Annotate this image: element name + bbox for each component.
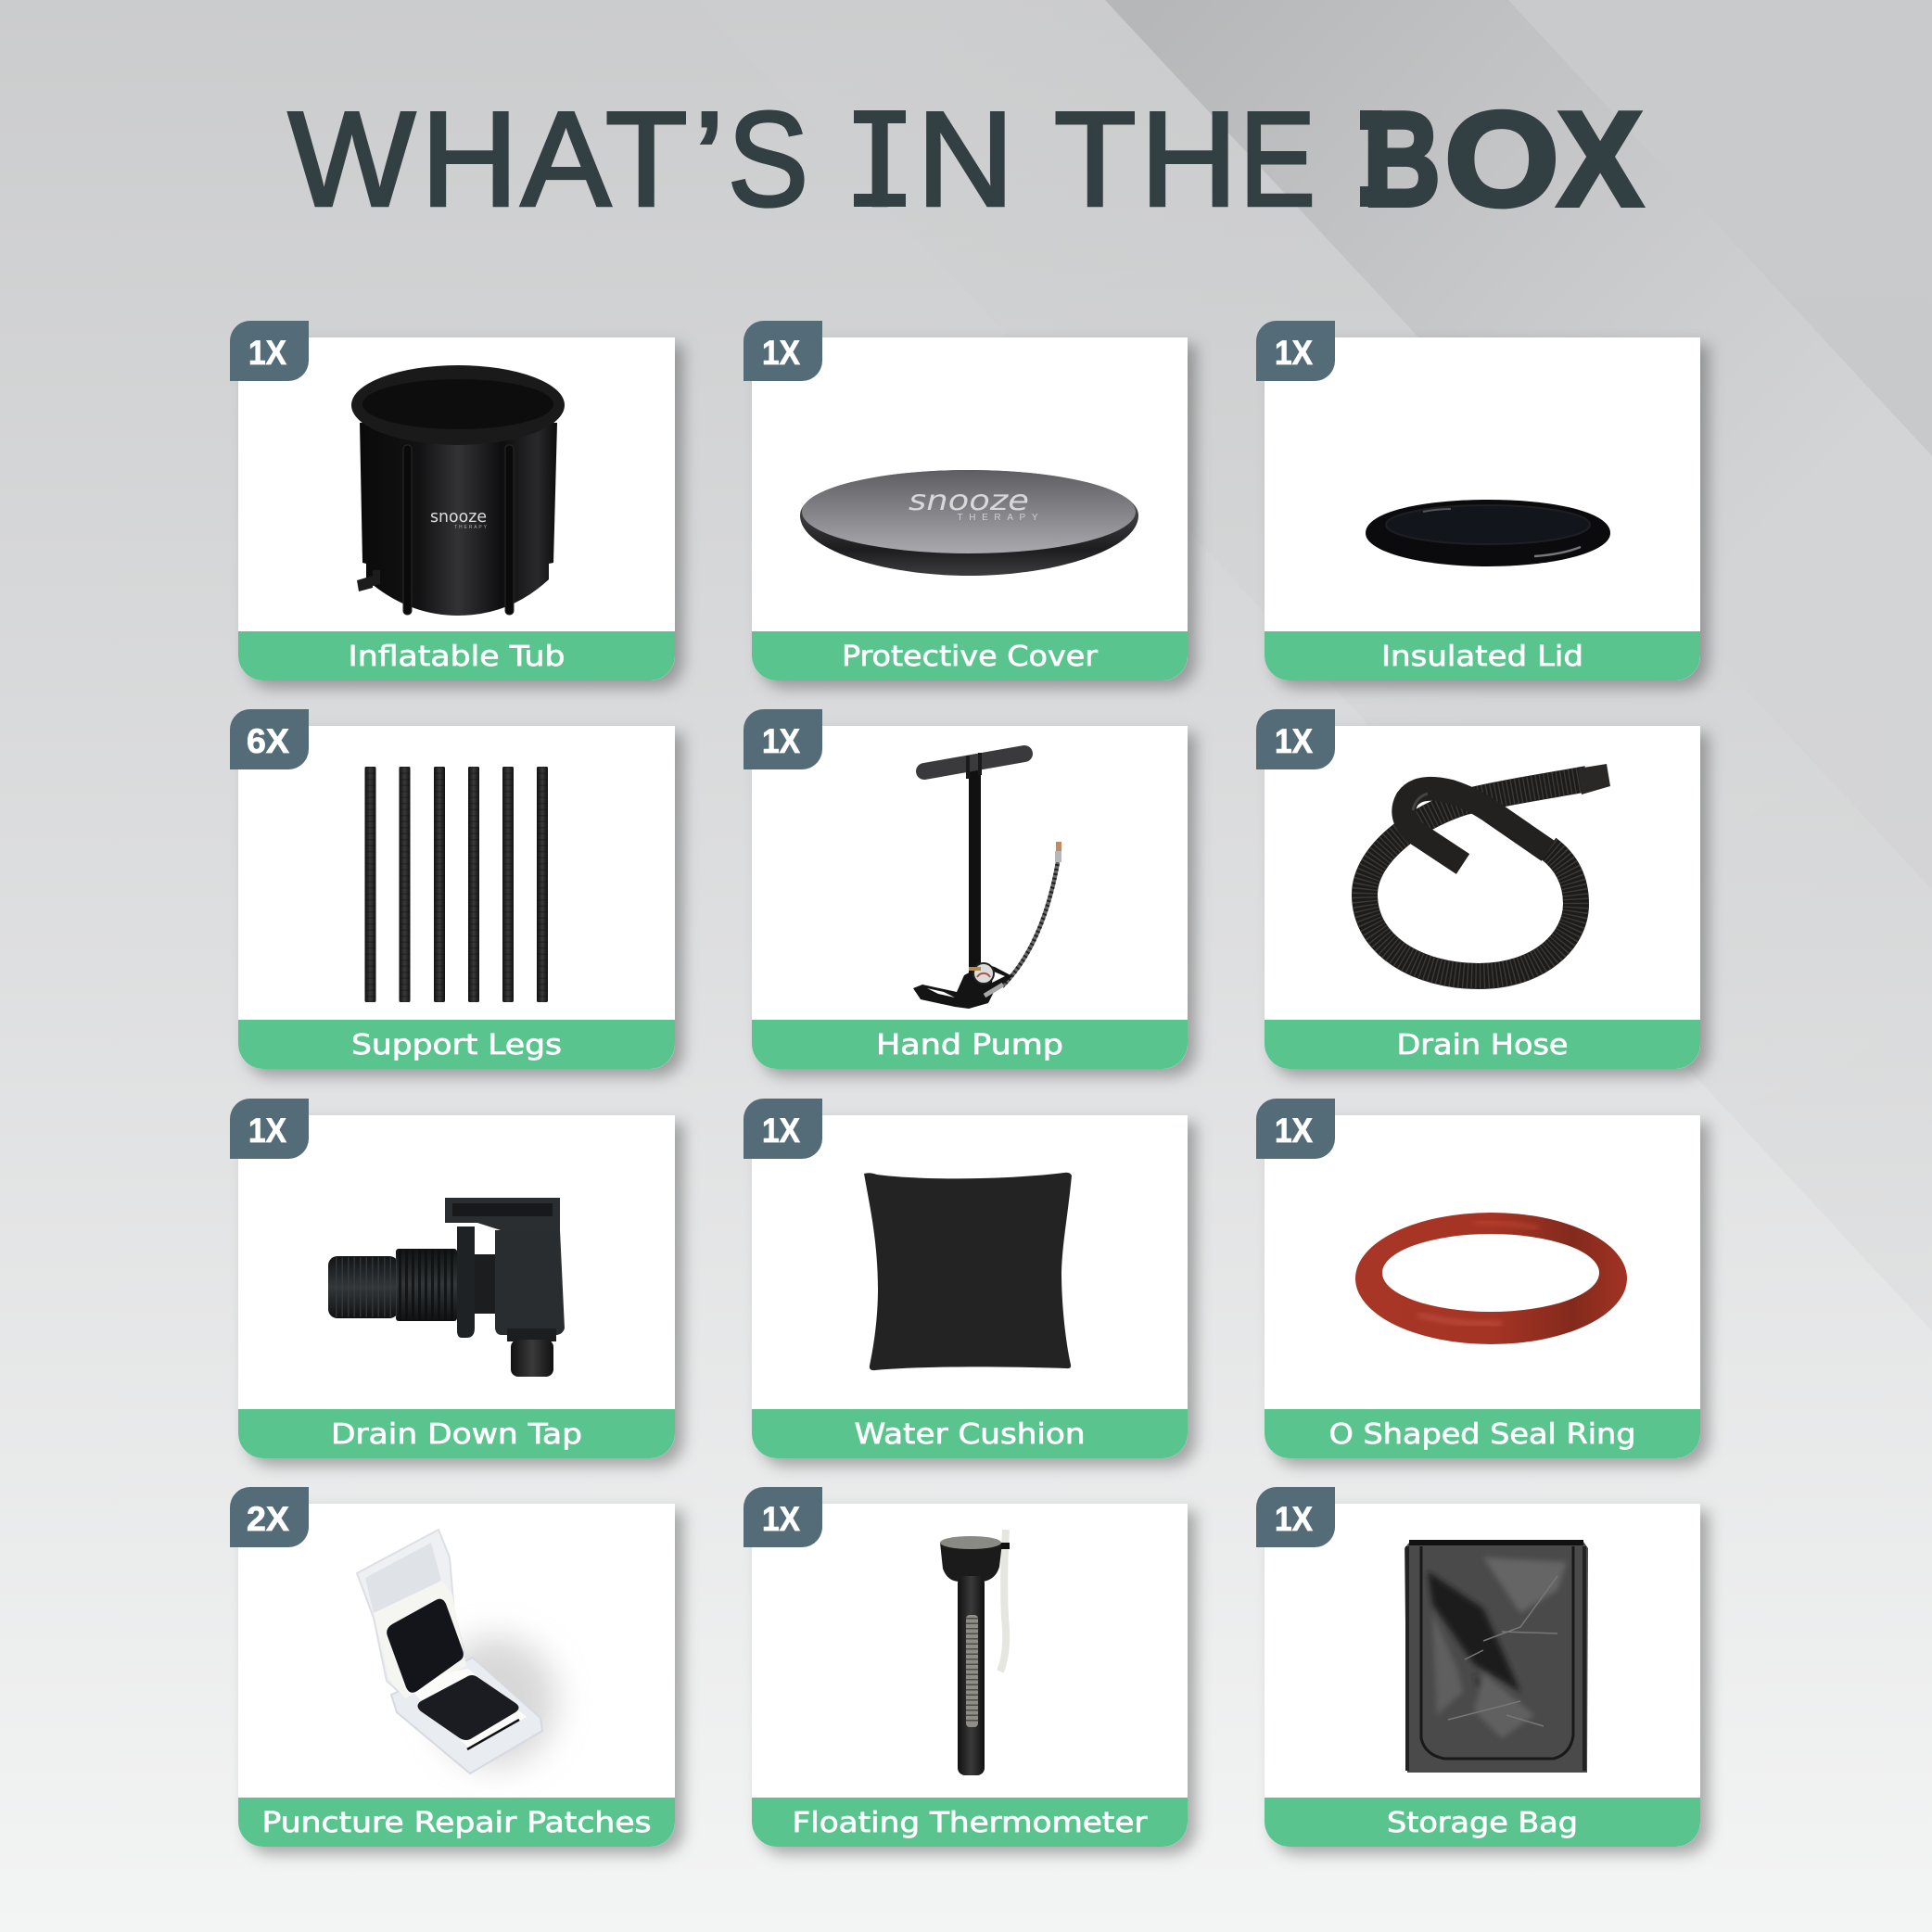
icon: cushion (864, 1173, 1072, 1370)
panel: inflatable tub (230, 321, 675, 680)
label: storage bag: Storage Bag (1387, 1807, 1578, 1839)
panel: o shaped seal ring (1256, 1099, 1700, 1458)
label: support legs: Support Legs (351, 1029, 562, 1061)
icon: cover: snooze (909, 485, 1029, 517)
badge: 1X: 1X (1275, 334, 1313, 372)
panel: hand pump (744, 709, 1188, 1069)
icon: cover: THERAPY (957, 513, 1038, 523)
icon: tub (351, 365, 565, 616)
badge: 1X: 1X (1275, 1112, 1313, 1150)
icon: lid (1366, 500, 1610, 566)
panel: support legs (230, 709, 675, 1069)
badge: 1X (230, 321, 309, 381)
title: S (728, 83, 808, 234)
icon: thermometer (940, 1530, 1010, 1775)
icon: legs (365, 767, 548, 1002)
badge: 1X (230, 1099, 309, 1159)
label: water cushion: Water Cushion (855, 1418, 1085, 1451)
panel: drain down tap (230, 1099, 675, 1458)
badge: 2X: 2X (247, 1500, 289, 1538)
panel: protective cover (744, 321, 1188, 680)
icon: tap (328, 1198, 565, 1377)
label: puncture repair patches: Puncture Repair Patches (261, 1807, 651, 1839)
icon: tub: snooze (430, 507, 487, 527)
badge: 1X (744, 1487, 822, 1547)
label: inflatable tub: Inflatable Tub (349, 641, 566, 673)
badge: 6X (230, 709, 309, 769)
badge: 1X: 1X (762, 1112, 800, 1150)
badge: 1X (744, 709, 822, 769)
title: IN (861, 83, 1014, 234)
panel: storage bag (1256, 1487, 1700, 1847)
panel: water cushion (744, 1099, 1188, 1458)
badge: 1X (1256, 709, 1335, 769)
title: TH (1054, 83, 1238, 234)
badge: 1X: 1X (762, 334, 800, 372)
panel: drain hose (1256, 709, 1700, 1069)
badge: 1X (744, 1099, 822, 1159)
title (288, 83, 1643, 234)
badge: 1X: 1X (762, 1500, 800, 1538)
panel: floating thermometer (744, 1487, 1188, 1847)
title: O (1444, 83, 1559, 234)
badge: 1X: 1X (762, 722, 800, 760)
label: insulated lid: Insulated Lid (1381, 641, 1583, 673)
icon: ring (1355, 1213, 1627, 1344)
icon: bag (1405, 1542, 1588, 1773)
badge: 2X (230, 1487, 309, 1547)
icon: cover (800, 470, 1138, 576)
title: E (1239, 83, 1316, 234)
label: drain hose: Drain Hose (1396, 1029, 1569, 1061)
panel: insulated lid (1256, 321, 1700, 680)
icon: hose (1365, 764, 1610, 976)
icon: tub: THERAPY (454, 525, 488, 530)
panel: puncture repair patches (230, 1487, 675, 1847)
badge: 1X: 1X (248, 1112, 286, 1150)
badge: 1X (1256, 1487, 1335, 1547)
label: drain down tap: Drain Down Tap (331, 1418, 582, 1451)
icon: pump (913, 753, 1061, 1009)
icon: patches (357, 1530, 556, 1773)
label: o shaped seal ring: O Shaped Seal Ring (1329, 1418, 1635, 1451)
title: B (1363, 83, 1441, 234)
label: protective cover: Protective Cover (842, 641, 1099, 673)
badge: 1X: 1X (248, 334, 286, 372)
title: WHAT’ (288, 83, 724, 234)
label: floating thermometer: Floating Thermometer (792, 1807, 1148, 1839)
badge: 6X: 6X (247, 722, 289, 760)
title: X (1557, 83, 1643, 234)
badge: 1X: 1X (1275, 722, 1313, 760)
badge: 1X (744, 321, 822, 381)
badge: 1X (1256, 1099, 1335, 1159)
label: hand pump: Hand Pump (876, 1029, 1063, 1061)
badge: 1X (1256, 321, 1335, 381)
badge: 1X: 1X (1275, 1500, 1313, 1538)
